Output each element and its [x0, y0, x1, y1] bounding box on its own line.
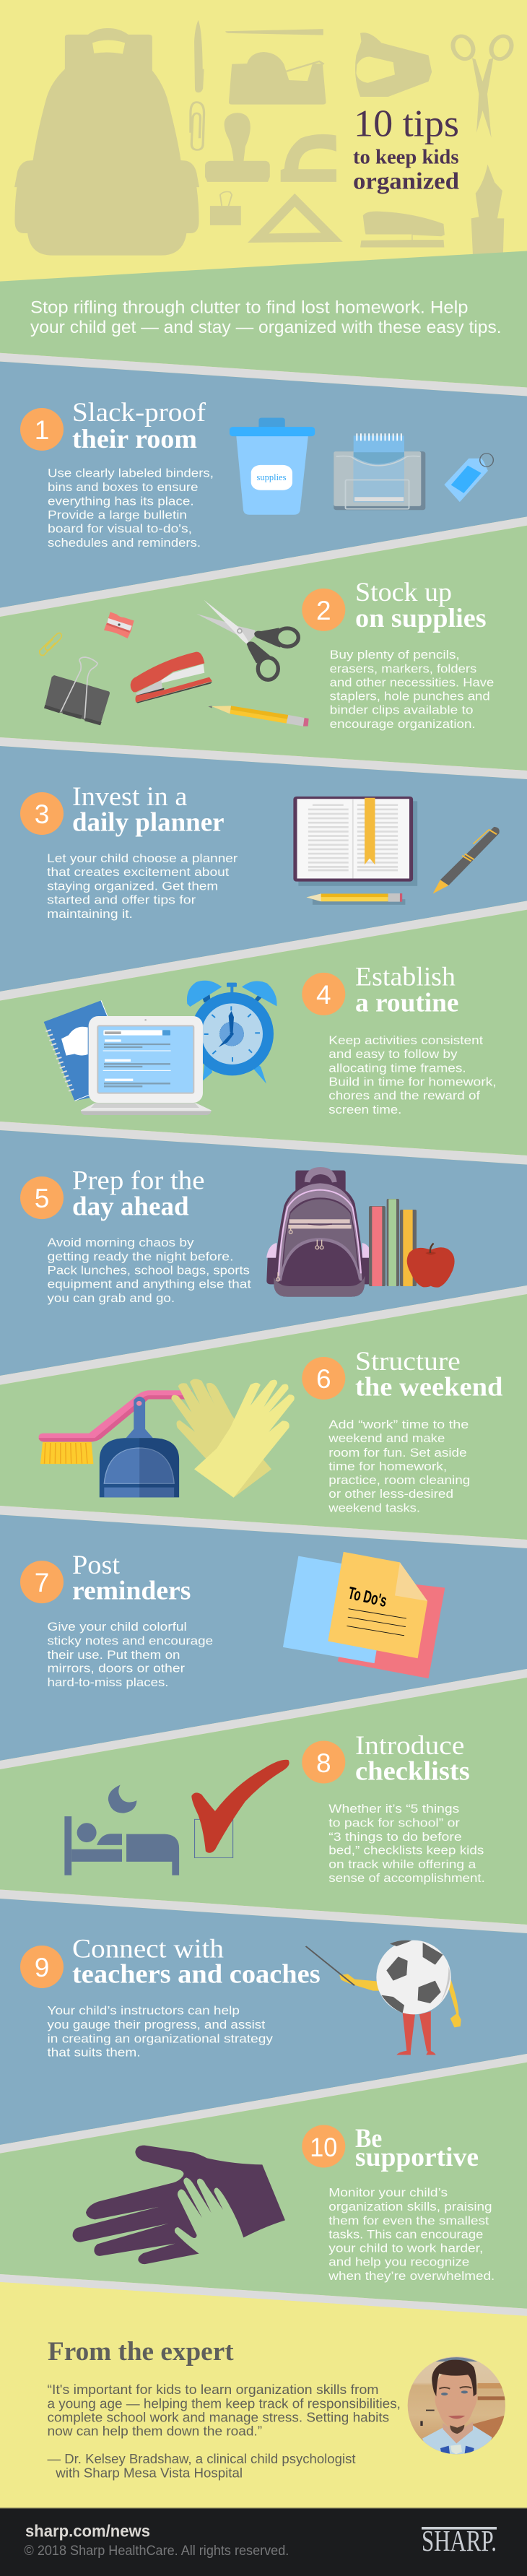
tip 4 text: Keep activities consistent	[328, 1033, 483, 1047]
tip 5 heading: day ahead	[72, 1192, 189, 1222]
tip 6 text: practice, room cleaning	[328, 1473, 470, 1487]
icon: pencil under planner	[307, 893, 405, 905]
panel: tip 6 band	[0, 1294, 527, 1540]
tip 8 text: on track while offering a	[328, 1857, 476, 1871]
tip 3 number: 3	[35, 799, 49, 829]
tip 4 text: and easy to follow by	[328, 1047, 458, 1061]
main title: 10 tips	[354, 103, 459, 145]
main title: to keep kids	[353, 147, 459, 169]
icon: dustpan	[100, 1397, 179, 1497]
expert heading: From the expert	[48, 2337, 234, 2367]
tip 5 heading: Prep for the	[72, 1166, 205, 1196]
expert attribution: — Dr. Kelsey Bradshaw, a clinical child psychologist	[48, 2452, 356, 2466]
icon: adult and child hands	[73, 2146, 285, 2264]
tip 1 text: board for visual to-do's,	[48, 522, 192, 536]
icon: open planner	[293, 797, 417, 886]
tip 4 text: allocating time frames.	[328, 1062, 466, 1075]
tip 3 text: started and offer tips for	[47, 893, 196, 907]
tip 3 text: staying organized. Get them	[47, 880, 218, 893]
tip 2 text: binder clips available to	[330, 703, 474, 717]
tip 10 number: 10	[310, 2133, 337, 2162]
tip 4 text: screen time.	[328, 1103, 401, 1116]
tip 8 heading: Introduce	[355, 1731, 464, 1761]
tip 6 number	[302, 1357, 345, 1400]
tip 7 heading: reminders	[72, 1577, 191, 1606]
expert attribution	[48, 2452, 356, 2480]
tip 10 text: Monitor your child’s	[328, 2186, 448, 2200]
tip 8 text: to pack for school” or	[328, 1816, 460, 1829]
tip 4 heading	[355, 963, 459, 1018]
main title	[353, 103, 459, 194]
icon: key tag	[444, 454, 493, 502]
copyright: © 2018 Sharp HealthCare. All rights reserved.	[25, 2544, 289, 2559]
panel: tip 2 band	[0, 526, 527, 771]
icon: notebook	[44, 1000, 108, 1101]
expert quote: now can help them down the road.”	[48, 2424, 262, 2439]
tip 7 text: their use. Put them on	[48, 1648, 180, 1662]
tip 4 text: chores and the reward of	[328, 1089, 480, 1103]
icon: pen	[433, 827, 500, 894]
tip 8 text: Whether it’s “5 things	[328, 1802, 459, 1816]
tip 7 text: hard-to-miss places.	[48, 1675, 169, 1689]
tip 9 heading	[72, 1935, 321, 1990]
panel: tip 3 band	[0, 746, 527, 992]
tip 8 heading: checklists	[355, 1757, 470, 1787]
tip 6 heading	[355, 1347, 503, 1402]
tip 8 text: “3 things to do before	[328, 1830, 462, 1844]
icon: pencil	[208, 706, 309, 727]
tip 8 heading	[355, 1731, 470, 1787]
expert quote	[48, 2382, 401, 2439]
icon: books and apple	[369, 1199, 455, 1288]
tip 10 text: organization skills, praising	[328, 2200, 492, 2213]
tip 2 text: and other necessities. Have	[330, 675, 494, 689]
panel: tip 1 band	[0, 362, 527, 608]
icon: sticky notes	[283, 1552, 445, 1678]
tip 7 text: sticky notes and encourage	[48, 1634, 213, 1647]
icon: supplies bin: supplies	[257, 472, 287, 482]
tip 2 text: encourage organization.	[330, 717, 476, 731]
tip 8 text	[328, 1802, 485, 1885]
tip 1 number	[20, 408, 64, 451]
expert quote: “It's important for kids to learn organization skills from	[48, 2382, 378, 2397]
tip 1 heading: their room	[72, 425, 197, 454]
tip 1 number: 1	[35, 415, 49, 445]
header silhouettes of school supplies	[14, 20, 515, 256]
tip 8 text: bed,” checklists keep kids	[328, 1843, 484, 1857]
tip 5 text: getting ready the night before.	[48, 1249, 234, 1263]
tip 6 number: 6	[316, 1364, 331, 1394]
tip 10 text: tasks. This can encourage	[328, 2227, 483, 2241]
tip 4 text: Build in time for homework,	[328, 1075, 497, 1089]
tip 5 number	[20, 1176, 64, 1219]
tip 1 text: bins and boxes to ensure	[48, 480, 198, 494]
tip 5 text: equipment and anything else that	[48, 1278, 251, 1291]
tip 3 text	[47, 851, 238, 921]
icon: alarm clock	[187, 981, 276, 1084]
tip 3 heading	[72, 782, 224, 838]
tip 10 number	[302, 2125, 345, 2168]
tip 3 text: Let your child choose a planner	[47, 851, 238, 865]
icon: scrub brush	[39, 1390, 194, 1464]
tip 2 text: erasers, markers, folders	[330, 662, 476, 675]
panel: tip 10 band	[0, 2063, 527, 2309]
footer bar	[0, 2507, 527, 2576]
tip 7 number	[20, 1561, 64, 1603]
tip 10 heading: supportive	[355, 2143, 479, 2172]
main title: organized	[353, 168, 459, 194]
tip 2 heading: Stock up	[355, 578, 452, 607]
tip 10 heading	[355, 2124, 479, 2172]
tip 2 heading	[355, 578, 487, 633]
Sharp logo: SHARP.	[422, 2524, 497, 2557]
tip 5 heading	[72, 1166, 205, 1222]
tip 7 heading	[72, 1551, 191, 1606]
tip 4 heading: Establish	[355, 963, 456, 992]
expert quote: complete school work and manage stress. Setting habits	[48, 2411, 389, 2425]
expert portrait photo	[406, 2356, 508, 2455]
icon: scissors	[196, 600, 298, 680]
icon: supplies bin	[230, 417, 315, 515]
tip 8 number: 8	[316, 1748, 331, 1778]
tip 2 text: Buy plenty of pencils,	[330, 648, 460, 662]
tip 5 number: 5	[35, 1184, 49, 1213]
tip 7 text: Give your child colorful	[48, 1620, 187, 1634]
tip 6 text: weekend and make	[328, 1431, 445, 1445]
tip 10 text: when they’re overwhelmed.	[328, 2269, 495, 2283]
icon: red check mark	[191, 1760, 289, 1858]
tip 5 text: you can grab and go.	[48, 1291, 175, 1305]
tip 7 heading: Post	[72, 1551, 121, 1580]
tip 6 text: or other less-desired	[328, 1487, 453, 1501]
expert attribution: with Sharp Mesa Vista Hospital	[55, 2466, 243, 2480]
tip 3 heading: daily planner	[72, 808, 224, 838]
panel: intro band	[0, 251, 527, 387]
tip 9 text: you gauge their progress, and assist	[48, 2018, 266, 2031]
tip 9 heading: teachers and coaches	[72, 1960, 321, 1990]
icon: paper clip	[40, 633, 61, 655]
intro text: your child get — and stay — organized with these easy tips.	[30, 318, 502, 337]
tip 9 text: that suits them.	[48, 2045, 140, 2059]
tip 9 heading: Connect with	[72, 1935, 225, 1964]
tip 1 heading: Slack-proof	[72, 398, 206, 428]
tip 2 heading: on supplies	[355, 604, 487, 633]
tip 9 text: in creating an organizational strategy	[48, 2031, 274, 2045]
tip 7 text	[48, 1620, 213, 1689]
panel: expert section	[0, 2282, 527, 2508]
icon: backpack	[266, 1167, 373, 1297]
tip 10 heading: Be	[355, 2124, 382, 2154]
tip 8 text: sense of accomplishment.	[328, 1871, 485, 1885]
tip 10 text: them for even the smallest	[328, 2213, 489, 2227]
panel: tip 8 band	[0, 1678, 527, 1925]
icon: red stapler	[131, 652, 212, 703]
tip 1 text: everything has its place.	[48, 494, 194, 508]
icon: tray with notepad	[334, 433, 425, 510]
tip 9 text: Your child’s instructors can help	[48, 2004, 240, 2018]
expert quote: a young age — helping them keep track of responsibilities,	[48, 2396, 401, 2411]
tip 6 text: Add “work” time to the	[328, 1418, 469, 1431]
tip 6 text: time for homework,	[328, 1460, 447, 1473]
tip 3 number	[20, 792, 64, 835]
panel: tip 5 band	[0, 1130, 527, 1376]
panel: tip 4 band	[0, 910, 527, 1155]
tip 6 heading: the weekend	[355, 1373, 503, 1402]
icon: binder clip	[44, 657, 110, 725]
footer url: sharp.com/news	[25, 2522, 150, 2541]
tip 7 number: 7	[35, 1568, 49, 1597]
tip 6 text	[328, 1418, 470, 1514]
intro text	[30, 298, 502, 337]
tip 3 text: maintaining it.	[47, 907, 133, 921]
icon: bed and moon	[64, 1784, 179, 1875]
tip 2 number: 2	[316, 596, 331, 625]
tip 10 text: your child to work harder,	[328, 2242, 483, 2255]
tip 5 text: Avoid morning chaos by	[48, 1236, 194, 1249]
tip 4 heading: a routine	[355, 988, 459, 1018]
tip 5 text: Pack lunches, school bags, sports	[48, 1264, 250, 1278]
panel: tip 9 band	[0, 1899, 527, 2145]
tip 1 text	[48, 467, 214, 550]
tip 6 text: weekend tasks.	[328, 1501, 420, 1514]
tip 7 text: mirrors, doors or other	[48, 1662, 185, 1675]
icon: sticky notes: To Do's	[347, 1584, 388, 1611]
tip 6 text: room for fun. Set aside	[328, 1446, 467, 1460]
icon: sharpener	[104, 612, 134, 638]
icon: soccer ball coach with pointer	[306, 1940, 461, 2055]
tip 10 text	[328, 2186, 495, 2283]
tip 2 text	[330, 648, 494, 731]
tip 4 number: 4	[316, 980, 331, 1010]
tip 1 text: schedules and reminders.	[48, 536, 201, 550]
tip 10 text: and help you recognize	[328, 2255, 469, 2269]
icon: laptop	[81, 1016, 212, 1115]
tip 9 text	[48, 2004, 274, 2059]
tip 3 heading: Invest in a	[72, 782, 187, 812]
tip 1 text: Use clearly labeled binders,	[48, 467, 214, 480]
tip 3 text: that creates excitement about	[47, 865, 229, 879]
tip 1 text: Provide a large bulletin	[48, 508, 187, 521]
icon: rubber gloves	[171, 1379, 295, 1498]
tip 2 number	[302, 589, 345, 631]
tip 2 text: staplers, hole punches and	[330, 690, 490, 703]
tip 9 number: 9	[35, 1953, 49, 1982]
panel: tip 7 band	[0, 1515, 527, 1761]
tip 5 text	[48, 1236, 251, 1305]
tip 6 heading: Structure	[355, 1347, 461, 1376]
tip 4 number	[302, 973, 345, 1015]
tip 9 number	[20, 1946, 64, 1988]
tip 4 text	[328, 1033, 497, 1116]
tip 8 number	[302, 1740, 345, 1784]
intro text: Stop rifling through clutter to find lost homework. Help	[30, 298, 468, 318]
tip 1 heading	[72, 398, 206, 454]
